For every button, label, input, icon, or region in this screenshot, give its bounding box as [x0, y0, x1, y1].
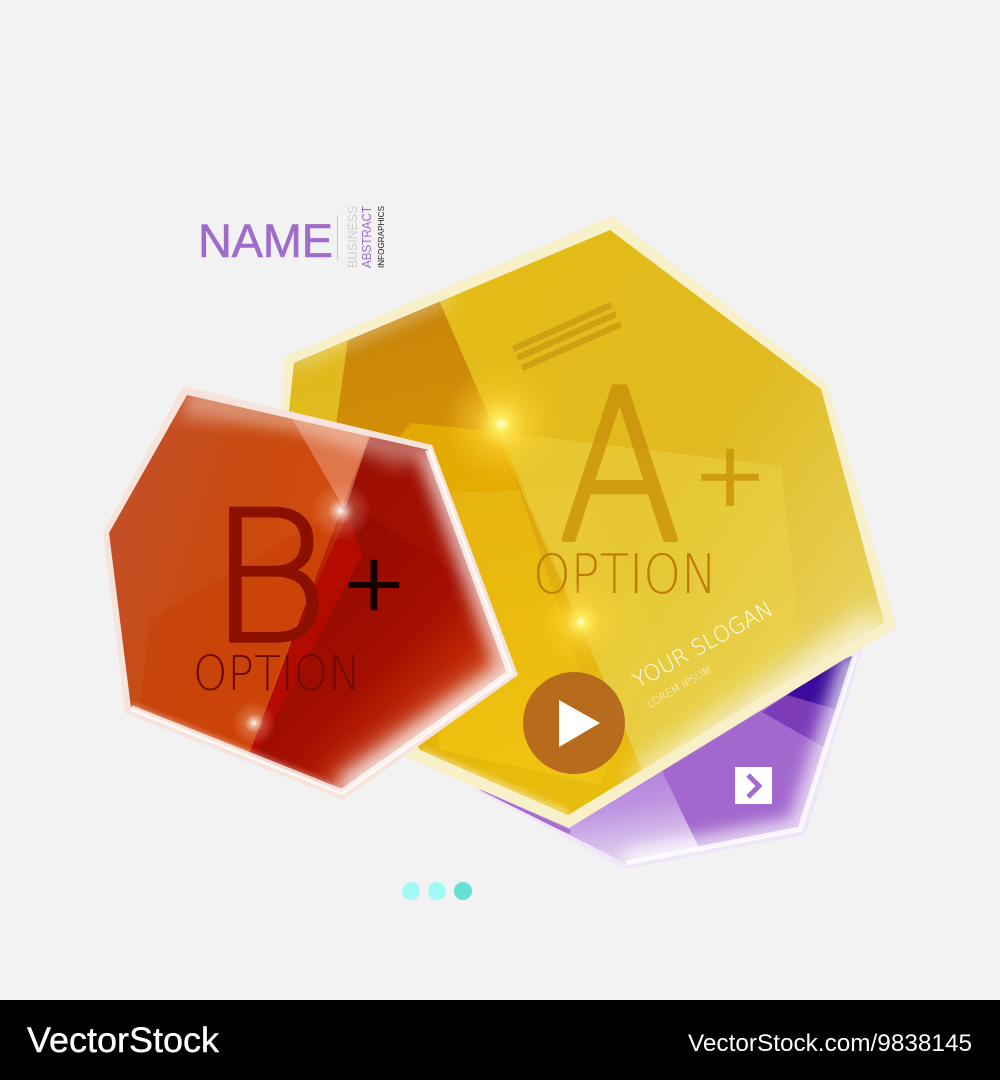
glow — [443, 366, 559, 482]
panel: yellow hexagon (option A) — [278, 216, 897, 828]
plus sign: + — [342, 538, 406, 627]
glow — [311, 481, 371, 541]
panel: red hexagon (option B) — [103, 386, 520, 800]
big letter A: A — [559, 346, 681, 588]
logo line ABSTRACT: ABSTRACT — [359, 206, 374, 268]
logo line INFOGRAPHICS: INFOGRAPHICS — [376, 206, 386, 268]
footer brand: VectorStock — [27, 1021, 220, 1060]
header: name logo — [198, 206, 386, 268]
panel: purple hexagon — [475, 640, 863, 869]
sub slogan: LOREM IPSUM — [645, 663, 714, 711]
header stripes — [512, 302, 622, 371]
footer url: VectorStock.com/9838145 — [688, 1030, 972, 1057]
glow — [232, 701, 276, 745]
slogan: YOUR SLOGAN — [629, 597, 777, 694]
footer bar — [0, 1000, 1000, 1080]
pagination dots — [402, 882, 472, 900]
play button — [523, 672, 625, 774]
logo word NAME: NAME — [198, 214, 333, 267]
glow — [537, 578, 625, 666]
option label: OPTION — [533, 543, 717, 606]
big letter B: B — [208, 473, 330, 685]
logo line BUSINESS: BUSINESS — [345, 206, 360, 268]
plus sign: + — [694, 425, 766, 525]
arrow button — [735, 767, 772, 804]
option label: OPTION — [193, 646, 361, 702]
